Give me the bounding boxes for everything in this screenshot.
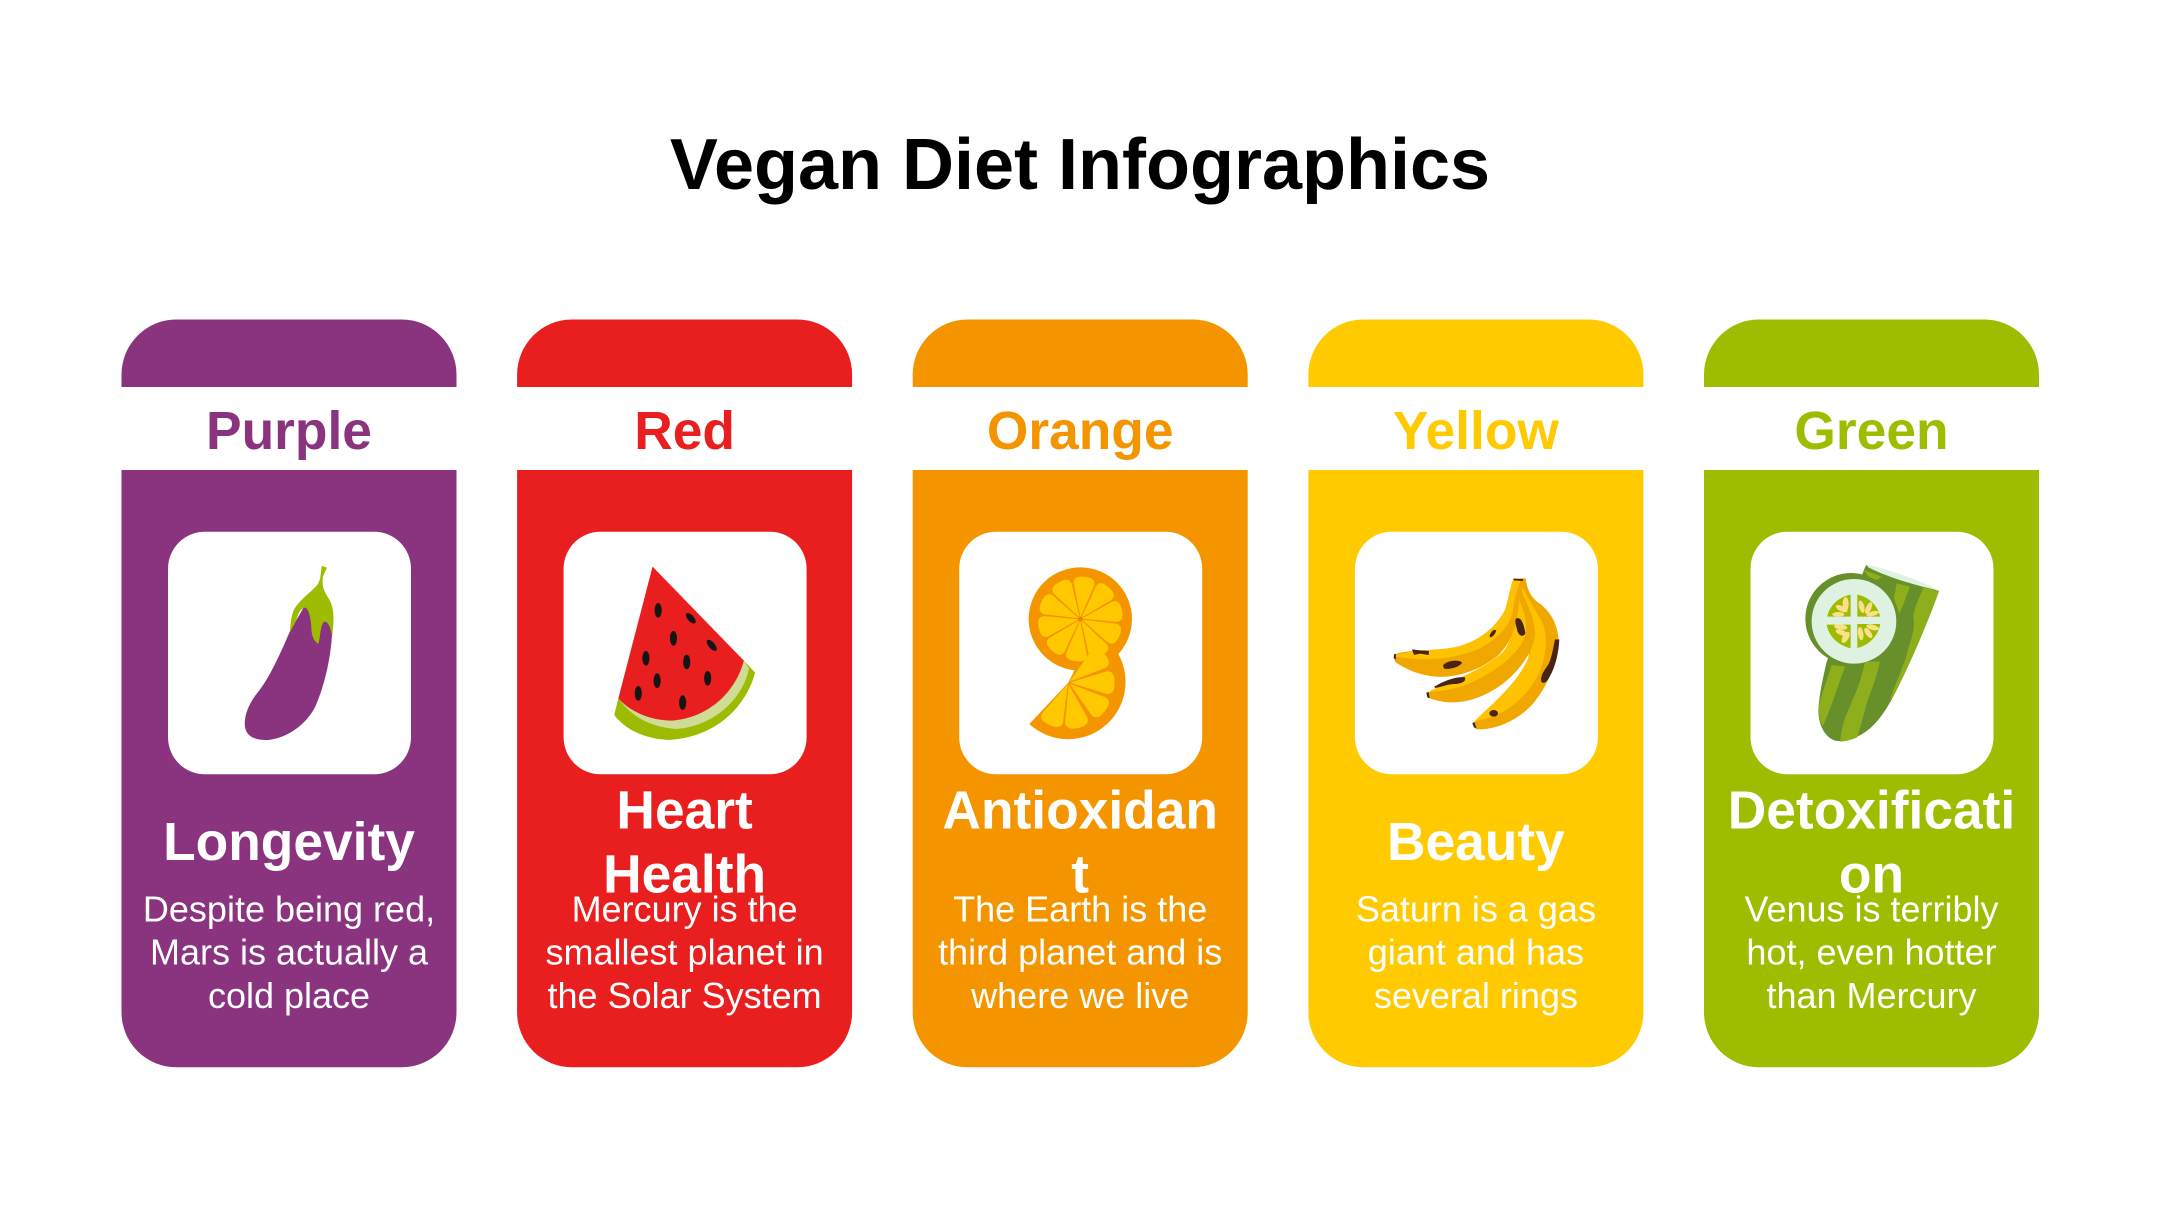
description: the Solar System — [548, 975, 822, 1016]
icon: eggplant — [245, 566, 333, 740]
description: than Mercury — [1766, 975, 1977, 1016]
heading: Antioxidant: t — [1071, 846, 1089, 904]
card body — [1308, 470, 1643, 1067]
label: Green: Green — [1794, 402, 1949, 461]
icon: bananas — [1394, 578, 1559, 729]
heading: Detoxification: on — [1839, 846, 1904, 904]
icon: cucumber — [1805, 564, 1939, 742]
description: giant and has — [1368, 932, 1584, 973]
card body — [122, 470, 456, 1067]
icon tile — [1750, 532, 1994, 774]
description: The Earth is the — [953, 888, 1207, 930]
description: Saturn is a gas — [1356, 888, 1596, 930]
description: several rings — [1374, 975, 1578, 1016]
icon tile — [168, 532, 411, 774]
icon: orange slices — [1029, 567, 1132, 739]
icon tile — [959, 532, 1202, 774]
description: cold place — [208, 975, 370, 1016]
card body — [517, 470, 852, 1067]
description: Venus is terribly — [1744, 888, 1999, 930]
icon tile — [564, 532, 807, 774]
panel: green detoxification — [1704, 319, 2039, 1067]
heading: Heart Health: Heart — [616, 782, 753, 840]
description: Despite being red, — [143, 888, 435, 930]
label: Orange: Orange — [987, 402, 1174, 461]
header tab — [1704, 319, 2039, 387]
label: Purple: Purple — [206, 402, 372, 461]
description: Mercury is the — [572, 888, 798, 930]
label: Yellow: Yellow — [1393, 402, 1559, 461]
header tab — [517, 319, 852, 387]
heading: Beauty: Beauty — [1387, 813, 1565, 872]
header tab — [1308, 319, 1643, 387]
heading: Longevity: Longevity — [163, 813, 415, 872]
description: Mars is actually a — [150, 932, 429, 973]
header tab — [122, 319, 456, 387]
description: hot, even hotter — [1746, 932, 1997, 973]
description: third planet and is — [938, 932, 1222, 973]
header tab — [913, 319, 1248, 387]
icon: watermelon — [614, 567, 755, 740]
description: where we live — [970, 975, 1189, 1016]
card body — [1704, 470, 2039, 1067]
label: Red: Red — [634, 402, 735, 461]
heading: Detoxification: Detoxificati — [1728, 782, 2015, 840]
panel: yellow beauty — [1308, 319, 1643, 1067]
title: Vegan Diet Infographics — [670, 125, 1490, 205]
heading: Antioxidant: Antioxidan — [942, 782, 1218, 840]
description: smallest planet in — [546, 932, 824, 973]
icon tile — [1355, 532, 1598, 774]
heading: Heart Health: Health — [603, 846, 766, 904]
panel: purple longevity — [122, 319, 456, 1067]
card body — [913, 470, 1248, 1067]
panel: orange antioxidant — [913, 319, 1248, 1067]
panel: red heart health — [517, 319, 852, 1067]
